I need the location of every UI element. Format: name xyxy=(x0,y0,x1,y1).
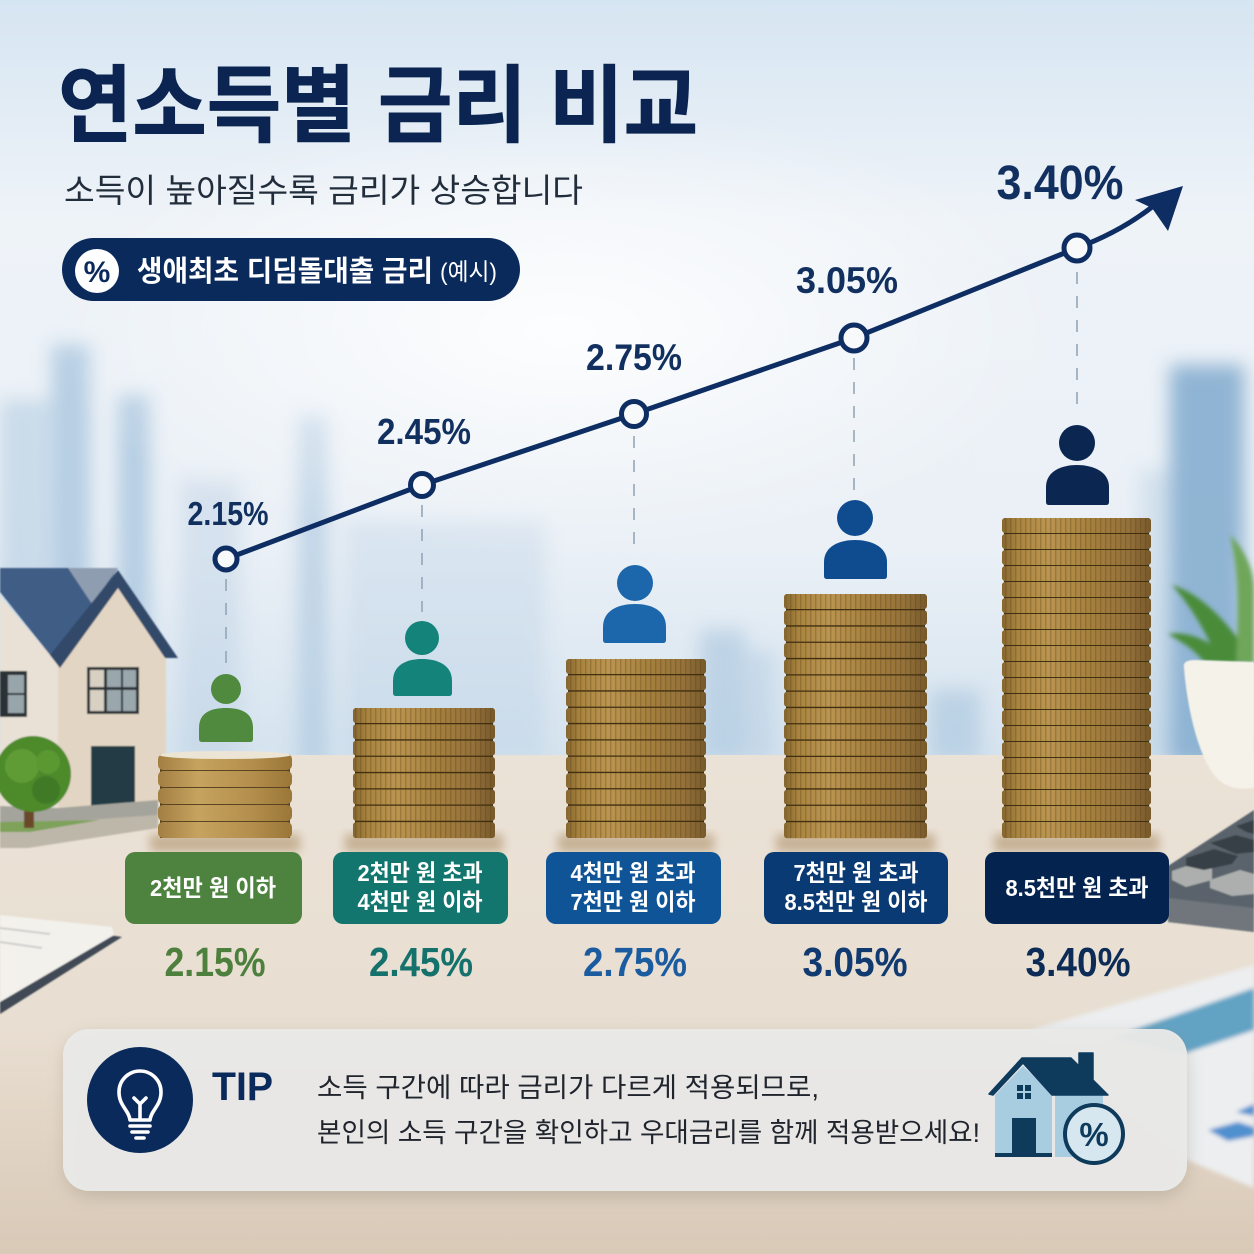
tip text xyxy=(317,1073,980,1148)
rate value 5: 3.40% xyxy=(1026,939,1130,985)
line chart: rate trend: 2.75% xyxy=(586,337,682,378)
rate value 3: 2.75% xyxy=(583,939,687,985)
coin stack 5 xyxy=(994,518,1159,852)
icon: house with percent: % xyxy=(1079,1116,1109,1153)
subtitle: 소득이 높아질수록 금리가 상승합니다 xyxy=(64,172,583,209)
icon: person green xyxy=(199,674,253,742)
icon: person teal xyxy=(393,621,452,696)
coin stack 1 xyxy=(150,751,300,852)
icon: light bulb xyxy=(87,1047,193,1153)
badge: loan rate label: 생애최초 디딤돌대출 금리 xyxy=(137,255,433,288)
decoration: calculator xyxy=(1168,810,1254,932)
label box 3: 4천만 원 초과 xyxy=(570,860,696,886)
badge: loan rate label xyxy=(62,238,520,301)
label box 2: 4천만 원 이하 xyxy=(358,889,483,915)
label box 4: 7천만 원 초과 xyxy=(794,860,918,886)
icon: person mid navy xyxy=(824,500,887,579)
coin stack 3 xyxy=(558,659,714,852)
line chart: rate trend: 3.05% xyxy=(796,260,898,301)
icon: house with percent xyxy=(989,1053,1123,1163)
label box 2: 2천만 원 초과 xyxy=(358,860,482,886)
coin stack 4 xyxy=(776,594,935,852)
arrow head xyxy=(1135,186,1183,231)
label box 5 xyxy=(985,852,1169,924)
tip panel xyxy=(63,1029,1187,1196)
line chart: rate trend: 2.15% xyxy=(188,495,268,532)
label box 1: 2천만 원 이하 xyxy=(150,875,276,901)
icon: percent circle: % xyxy=(84,256,110,289)
label box 2 xyxy=(333,852,508,924)
label box 4: 8.5천만 원 이하 xyxy=(784,889,928,915)
icon: person blue xyxy=(603,565,666,643)
line chart: rate trend: 3.40% xyxy=(996,157,1124,210)
rate value 4: 3.05% xyxy=(802,939,908,985)
rate value 2: 2.45% xyxy=(369,939,473,985)
label box 5: 8.5천만 원 초과 xyxy=(1006,875,1148,901)
tip text: 소득 구간에 따라 금리가 다르게 적용되므로, xyxy=(317,1073,819,1103)
rate value 1: 2.15% xyxy=(164,939,266,985)
decoration: chart paper, lower right xyxy=(1030,965,1254,1188)
icon: person navy xyxy=(1046,425,1109,505)
label box 1 xyxy=(125,852,302,924)
line chart: rate trend: 2.45% xyxy=(377,411,471,452)
tip text: 본인의 소득 구간을 확인하고 우대금리를 함께 적용받으세요! xyxy=(317,1118,980,1148)
line chart: rate trend xyxy=(188,157,1183,665)
background: wooden desk xyxy=(0,755,1254,1254)
label box 3: 7천만 원 이하 xyxy=(570,889,696,915)
decoration: documents, left xyxy=(0,915,122,1014)
background: sky and blurred city xyxy=(0,0,1254,780)
icon: percent circle xyxy=(75,249,119,293)
tip heading: TIP xyxy=(212,1065,273,1109)
coin stack 2 xyxy=(345,708,503,852)
label box 3 xyxy=(546,852,721,924)
decoration: house model xyxy=(0,568,178,848)
title: 연소득별 금리 비교 xyxy=(58,59,698,153)
decoration: plant in pot xyxy=(1168,535,1254,788)
label box 4 xyxy=(764,852,948,924)
badge: loan rate label: (예시) xyxy=(440,259,497,286)
